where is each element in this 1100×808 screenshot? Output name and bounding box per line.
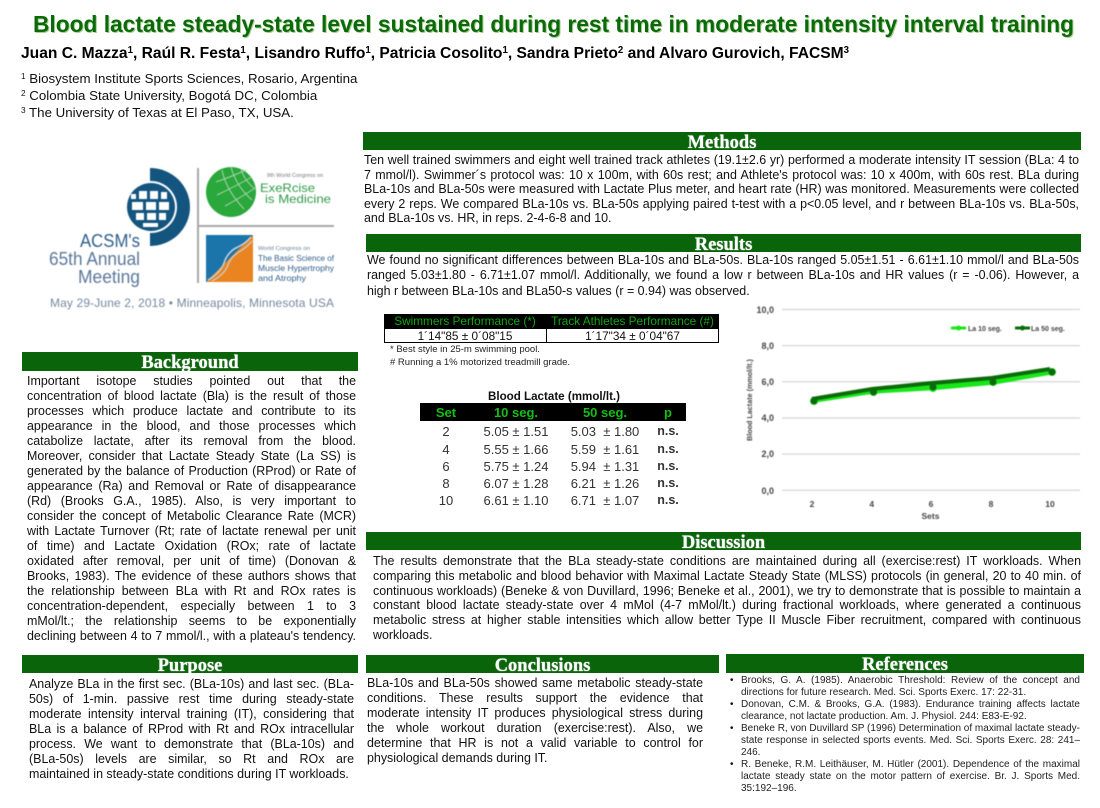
text: methods: Ten well trained swimmers and eight well trained track athletes (19.1±2.6 yr) performed a moderate intensity IT session (BLa: 4 to bbox=[364, 153, 1079, 167]
text: methods: 7 mmol/l). Swimmer´s protocol was: 10 x 100m, with 60s rest; and Athlete's protocol was: 10 x 400m, with 60s rest. BLa during bbox=[364, 168, 1079, 182]
logo text: dates and place: May 29-June 2, 2018 • Minneapolis, Minnesota USA bbox=[50, 296, 334, 310]
performance table: Track Athletes Performance (#) bbox=[551, 314, 714, 328]
panel: discussion bbox=[366, 532, 1082, 642]
performance table: 1´14"85 ± 0´08"15 bbox=[418, 329, 512, 343]
table rows: 6 bbox=[442, 458, 450, 474]
table rows: 5.55 ± 1.66 bbox=[484, 442, 548, 456]
text: background: consider the concept of Metabolic Clearance Rate (MCR) bbox=[27, 509, 356, 523]
y axis labels: 0,0 bbox=[761, 486, 774, 496]
text: discussion: continuous workloads) (Beneke & von Duvillard, 1996; Beneke et al., 2001), we try to demonstrate that is possible to maintain a bbox=[373, 584, 1081, 598]
x axis labels: 6 bbox=[929, 499, 934, 509]
performance table: 1´17"34 ± 0´04"67 bbox=[585, 329, 680, 343]
title: Blood lactate steady-state level sustained during rest time in moderate intensity interval training bbox=[33, 11, 1074, 37]
heading: discussion: Discussion bbox=[682, 533, 765, 553]
text: background: appearance (Ra) and Removal or Rate of disappearance bbox=[27, 479, 356, 493]
text: methods bbox=[364, 153, 1079, 225]
table rows: n.s. bbox=[657, 458, 679, 472]
line chart: blood lactate by set bbox=[745, 305, 1080, 521]
text: purpose: 50s) of 1-min. passive rest time during steady-state bbox=[29, 692, 354, 706]
text: background: catabolize lactate, after its removal from the blood. bbox=[27, 434, 356, 448]
table rows: 4 bbox=[442, 442, 450, 456]
text: methods: every 2 reps. We compared BLa-10s vs. BLa-50s applying paired t-test with a p<0.05 level, and r between BLa-10s vs. BLa-50s, bbox=[364, 197, 1079, 211]
table header: Set bbox=[436, 405, 456, 420]
text: background: concentration of blood lactate (Bla) is the result of those bbox=[27, 389, 356, 403]
table rows: 6.61 ± 1.10 bbox=[484, 492, 548, 508]
series: La 50 seg bbox=[811, 369, 1055, 404]
y axis labels: 2,0 bbox=[761, 449, 774, 459]
table rows: 5.05 ± 1.51 bbox=[484, 424, 548, 439]
y axis title: Blood Lactate (mmol/lt.) bbox=[745, 358, 754, 441]
text: references list: R. Beneke, R.M. Leithäuser, M. Hütler (2001). Dependence of the maximal bbox=[741, 759, 1080, 770]
text: background: declining between 4 to 7 mmol/l., with a plateau's tendency. bbox=[27, 629, 356, 643]
text: references list: 246. bbox=[741, 747, 760, 758]
text: methods: and BLa-10s vs. HR, in reps. 2-4-6-8 and 10. bbox=[364, 211, 612, 225]
table rows: n.s. bbox=[657, 442, 679, 456]
x axis title: Sets bbox=[922, 511, 940, 521]
table title: Blood Lactate (mmol/lt.) bbox=[488, 390, 620, 403]
heading: purpose: Purpose bbox=[158, 656, 222, 676]
table rows: n.s. bbox=[657, 424, 679, 438]
text: background: concentration-dependent, especially between 1 to 3 bbox=[27, 599, 356, 613]
logo text: World Congress on Basic Science: and Atrophy bbox=[258, 273, 307, 283]
heading: references: References bbox=[862, 655, 948, 675]
heading: conclusions: Conclusions bbox=[495, 656, 590, 676]
heading: methods: Methods bbox=[688, 133, 756, 153]
table notes bbox=[390, 344, 570, 368]
text: results: high r between BLa-10s and BLa50-s values (r = 0.94) was observed. bbox=[367, 284, 750, 298]
text: results bbox=[367, 253, 1080, 298]
text: purpose: maintained in steady-state conditions during IT workloads. bbox=[29, 766, 349, 780]
text: background: of time) and Lactate Oxidation (ROx; rate of lactate bbox=[27, 539, 356, 553]
heading: discussion bbox=[366, 532, 1081, 550]
table header bbox=[384, 314, 719, 329]
text: purpose bbox=[29, 676, 354, 780]
logo text: Exercise is Medicine: ExeRcise bbox=[260, 181, 315, 195]
list bullets bbox=[730, 675, 734, 770]
table rows: 2 bbox=[442, 424, 450, 439]
x axis labels: 4 bbox=[869, 499, 874, 509]
performance table bbox=[384, 314, 719, 368]
table rows: 6.71 ± 1.07 bbox=[571, 492, 639, 508]
text: results: We found no significant differences between BLa-10s and BLa-50s. BLa-10s ranged 5.05±1.51 - 6.61±1.10 mmol/l and BLa-50s bbox=[367, 253, 1079, 267]
text: conclusions: BLa-10s and BLa-50s showed same metabolic steady-state bbox=[367, 676, 703, 690]
x axis labels: 10 bbox=[1045, 499, 1055, 509]
heading: conclusions bbox=[366, 655, 719, 673]
table rows: 5.59 ± 1.61 bbox=[571, 442, 639, 456]
text: references list: directions for future research. Med. Sci. Sports Exerc. 17: 22-31. bbox=[741, 687, 1026, 698]
x axis labels: 2 bbox=[810, 499, 815, 509]
logo text: World Congress on Basic Science bbox=[258, 246, 335, 283]
heading: results bbox=[366, 234, 1081, 252]
text: conclusions bbox=[367, 676, 703, 765]
heading: references bbox=[726, 654, 1084, 673]
text: background: Important isotope studies pointed out that the bbox=[27, 374, 356, 388]
text: conclusions: physiological demands during IT. bbox=[367, 751, 547, 765]
panel: background bbox=[22, 352, 358, 643]
y axis labels bbox=[756, 305, 774, 496]
text: background: oxidated after removal, per unit of time) (Donovan & bbox=[27, 554, 356, 568]
text: discussion: workloads. bbox=[373, 628, 432, 642]
table rows: 5.94 ± 1.31 bbox=[571, 458, 639, 474]
text: conclusions: the whole workout duration (exercise:rest). Also, we bbox=[367, 721, 703, 735]
affiliations: 3 The University of Texas at El Paso, TX, USA. bbox=[21, 105, 294, 120]
icon: muscle hypertrophy square bbox=[206, 235, 253, 282]
text: results: ranged 5.03±1.80 - 6.71±1.07 mmol/l. Additionally, we found a low r between BLa-10s and HR values (r = -0.06). However, a bbox=[367, 268, 1079, 282]
affiliations: 1 Biosystem Institute Sports Sciences, Rosario, Argentina bbox=[21, 71, 357, 86]
text: conclusions: moderate intensity IT produces physiological stress during bbox=[367, 706, 703, 720]
text: background: appearance in the blood, and those processes which bbox=[27, 419, 356, 433]
table header: p bbox=[664, 405, 672, 420]
text: references list: 35:192–196. bbox=[741, 783, 797, 794]
text: background bbox=[27, 374, 356, 643]
list bullets: • bbox=[730, 675, 733, 686]
text: references list: Beneke R, von Duvillard SP (1996) Determination of maximal lactate steady- bbox=[741, 723, 1080, 734]
text: references list: Donovan, C.M. & Brooks, G.A. (1983). Endurance training affects lactate bbox=[741, 699, 1080, 710]
table rows: 8 bbox=[442, 476, 450, 490]
text: background: with Lactate Turnover (Rt; rate of lactate renewal per unit bbox=[27, 524, 356, 538]
list bullets: • bbox=[730, 723, 733, 734]
text: conclusions: determine that HR is not a valid variable to control for bbox=[367, 736, 703, 750]
table rows bbox=[439, 424, 679, 508]
list bullets: • bbox=[730, 759, 733, 770]
heading: purpose bbox=[22, 655, 358, 673]
heading: results: Results bbox=[695, 235, 752, 255]
table notes: # Running a 1% motorized treadmill grade. bbox=[390, 357, 570, 368]
text: background: mMol/lt.; the relationship seems to be exponentially bbox=[27, 614, 356, 628]
table rows: n.s. bbox=[657, 492, 679, 506]
text: references list: clearance, not lactate production. Am. J. Physiol. 244: E83-E-92. bbox=[741, 711, 1027, 722]
logo text: World Congress on Basic Science: World Congress on bbox=[258, 246, 310, 252]
table header bbox=[420, 403, 686, 421]
table rows: n.s. bbox=[657, 476, 679, 490]
text: background: (Rd) (Brooks G.A., 1985). Also, is very important to bbox=[27, 494, 356, 508]
logo text: Exercise is Medicine: 9th World Congress on bbox=[267, 173, 323, 179]
text: conclusions: conditions. These results support the evidence that bbox=[367, 691, 703, 705]
affiliations bbox=[21, 71, 358, 120]
text: background: generated by the balance of Production (RProd) or Rate of bbox=[27, 464, 356, 478]
logo text: World Congress on Basic Science: Muscle Hypertrophy bbox=[258, 263, 335, 273]
text: methods: BLa-10s and BLa-50s were measured with Lactate Plus meter, and heart rate (HR) was monitored. Measurements were collected bbox=[364, 182, 1079, 196]
table header: 50 seg. bbox=[583, 405, 627, 420]
panel: purpose bbox=[22, 655, 358, 780]
table rows: 6.21 ± 1.26 bbox=[571, 476, 639, 490]
text: references list: state response in selected sports events. Med. Sci. Sports Exerc. 28: 241– bbox=[741, 735, 1080, 746]
authors: Juan C. Mazza1, Raúl R. Festa1, Lisandro Ruffo1, Patricia Cosolito1, Sandra Prieto2 and Alvaro Gurovich, FACSM3 bbox=[21, 45, 849, 62]
logo text: ACSM's 65th Annual Meeting: ACSM's bbox=[80, 231, 140, 251]
logo text: World Congress on Basic Science: The Basic Science of bbox=[258, 253, 335, 263]
heading: background bbox=[22, 352, 358, 371]
text: discussion: metabolic stress at higher stable intensities which allow better Type II Muscle Fiber recruitment, compared with continuous bbox=[373, 613, 1081, 627]
y axis labels: 8,0 bbox=[761, 341, 774, 351]
text: references list: lactate steady state on the motor pattern of exercise. Br. J. Sports Med. bbox=[741, 771, 1080, 782]
panel: results bbox=[366, 234, 1081, 298]
blood lactate table bbox=[420, 390, 686, 508]
icon: Exercise is Medicine globe bbox=[206, 167, 256, 217]
performance table: Swimmers Performance (*) bbox=[394, 314, 536, 328]
panel: references bbox=[726, 654, 1084, 794]
text: discussion: comparing this metabolic and blood behavior with Maximal Lactate Steady State (MLSS) protocols (in general, 20 to 40 min. of bbox=[373, 569, 1081, 583]
text: discussion: The results demonstrate that the BLa steady-state conditions are maintained during all (exercise:rest) IT workloads. When bbox=[373, 554, 1081, 568]
icon: ACSM globe bbox=[125, 168, 190, 246]
text: purpose: (BLa-50s) levels are similar, so Rt and ROx are bbox=[29, 752, 354, 766]
panel: conclusions bbox=[366, 655, 719, 765]
heading: background: Background bbox=[141, 353, 239, 373]
logo text: ACSM's 65th Annual Meeting: 65th Annual bbox=[49, 249, 140, 269]
table row bbox=[384, 329, 719, 343]
table notes: * Best style in 25-m swimming pool. bbox=[390, 344, 540, 355]
text: background: Brooks, 1983). The evidence of these authors shows that bbox=[27, 569, 356, 583]
table rows: 5.75 ± 1.24 bbox=[484, 458, 548, 474]
logo text: Exercise is Medicine bbox=[260, 173, 331, 206]
y axis labels: 6,0 bbox=[761, 377, 774, 387]
legend bbox=[951, 326, 1065, 333]
text: purpose: BLa is a balance of RProd with Rt and ROx intracellular bbox=[29, 722, 354, 736]
text: references list: Brooks, G. A. (1985). Anaerobic Threshold: Review of the concept and bbox=[741, 675, 1080, 686]
heading: methods bbox=[363, 132, 1081, 150]
y axis labels: 4,0 bbox=[761, 413, 774, 423]
x axis labels: 8 bbox=[989, 499, 994, 509]
logo text: ACSM's 65th Annual Meeting bbox=[49, 231, 140, 287]
affiliations: 2 Colombia State University, Bogotá DC, Colombia bbox=[21, 88, 317, 103]
table rows: 6.07 ± 1.28 bbox=[484, 476, 548, 490]
text: references list bbox=[741, 675, 1080, 794]
table header: 10 seg. bbox=[494, 405, 538, 420]
text: background: processes which produce lactate and contribute to its bbox=[27, 404, 356, 418]
text: discussion bbox=[373, 554, 1082, 642]
table rows: 5.03 ± 1.80 bbox=[571, 424, 639, 439]
text: discussion: constant blood lactate steady-state over 4 mMol (4-7 mMol/lt.) during fractional workloads, where generated a continuous bbox=[373, 598, 1081, 612]
panel: methods bbox=[363, 132, 1081, 225]
table rows: 10 bbox=[439, 492, 453, 508]
y axis labels: 10,0 bbox=[756, 305, 774, 315]
list bullets: • bbox=[730, 699, 733, 710]
legend: La 10 seg. bbox=[968, 326, 1002, 333]
logo text: Exercise is Medicine: is Medicine bbox=[265, 192, 331, 206]
x axis labels bbox=[810, 499, 1055, 509]
logo: ACSM 65th annual meeting bbox=[49, 166, 335, 310]
text: purpose: moderate intensity interval training (IT), considering that bbox=[29, 706, 354, 720]
text: background: Moreover, consider that Lactate Steady State (La SS) is bbox=[27, 449, 356, 463]
text: purpose: Analyze BLa in the first sec. (BLa-10s) and last sec. (BLa- bbox=[29, 676, 354, 690]
logo text: ACSM's 65th Annual Meeting: Meeting bbox=[78, 267, 140, 287]
series: La 10 seg bbox=[810, 368, 1056, 404]
legend: La 50 seg. bbox=[1031, 326, 1065, 333]
text: background: the relationship between BLa with Rt and ROx rates is bbox=[27, 584, 356, 598]
text: purpose: process. We want to demonstrate that (BLa-10s) and bbox=[29, 736, 354, 750]
